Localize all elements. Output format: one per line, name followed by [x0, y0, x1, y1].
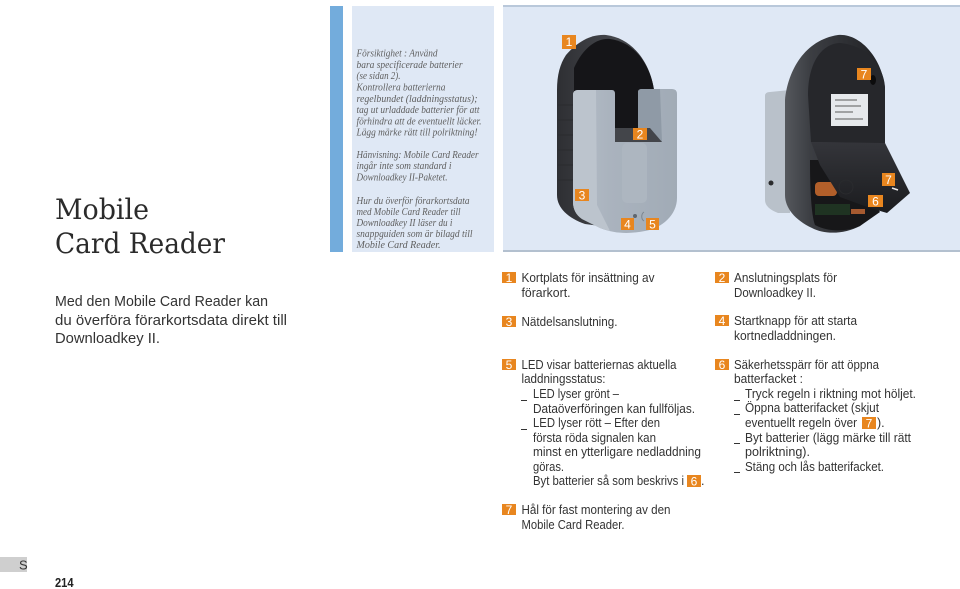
- legend item 6: Byt batterier (lägg märke till rätt: [745, 431, 912, 445]
- blue accent bar: [330, 6, 343, 252]
- badge 5: 5: [649, 218, 656, 232]
- note: reference: ingår inte som standard i: [356, 161, 452, 172]
- note: transfer: Mobile Card Reader.: [356, 240, 440, 251]
- badge 4: 4: [624, 218, 631, 232]
- legend item 5: LED visar batteriernas aktuella: [522, 358, 677, 372]
- badge 7 lower: 7: [885, 173, 892, 187]
- badge 7 lower: [882, 173, 895, 187]
- legend item 6: [715, 358, 916, 474]
- legend item 5: LED lyser grönt –: [533, 387, 619, 401]
- badge 1: [562, 35, 576, 49]
- legend item 2: Downloadkey II.: [734, 286, 816, 300]
- legend item 6: ).: [877, 416, 885, 430]
- legend item 5: 5: [506, 358, 513, 372]
- legend item 6: Öppna batterifacket (skjut: [745, 401, 879, 415]
- note: transfer: Hur du överför förarkortsdata: [356, 196, 470, 207]
- badge 3: [575, 188, 589, 202]
- section tab S: [0, 557, 28, 572]
- note: transfer: Downloadkey II läser du i: [356, 218, 453, 229]
- intro text: Med den Mobile Card Reader kan: [55, 293, 268, 310]
- legend item 2: Anslutningsplats för: [734, 271, 837, 285]
- legend item 7: Hål för fast montering av den: [522, 503, 671, 517]
- badge 6: 6: [872, 194, 879, 208]
- legend item 4: kortnedladdningen.: [734, 329, 836, 343]
- intro text: Downloadkey II.: [55, 330, 160, 347]
- note: caution: [356, 48, 482, 138]
- title: Card Reader: [55, 227, 226, 260]
- note: caution: Lägg märke rätt till polriktning!: [356, 128, 478, 138]
- intro text: du överföra förarkortsdata direkt till: [55, 312, 287, 329]
- legend item 6: polriktning).: [745, 445, 810, 459]
- intro text: [55, 293, 287, 347]
- badge 6: [868, 194, 883, 208]
- legend item 6: Stäng och lås batterifacket.: [745, 460, 884, 474]
- title: [55, 193, 226, 260]
- device: front view: [557, 35, 677, 233]
- legend item 4: [715, 314, 857, 343]
- legend item 5: LED lyser rött – Efter den: [533, 416, 660, 430]
- note: reference: [356, 150, 479, 184]
- note: caution: (se sidan 2).: [356, 71, 400, 82]
- note: caution: Försiktighet : Använd: [356, 48, 438, 60]
- legend item 5: Dataöverföringen kan fullföljas.: [533, 402, 695, 416]
- panel: product photo: [503, 5, 960, 252]
- badge 7 top: 7: [861, 68, 868, 82]
- note: caution: tag ut urladdade batterier för att: [356, 105, 480, 116]
- legend item 6: eventuellt regeln över: [745, 416, 857, 430]
- note: caution: regelbundet (laddningsstatus);: [356, 94, 478, 105]
- legend item 4: Startknapp för att starta: [734, 314, 857, 328]
- note: caution: förhindra att de eventuellt läcker.: [356, 116, 482, 128]
- legend item 5: .: [701, 474, 704, 488]
- device: rear view: [765, 35, 910, 233]
- note: transfer: med Mobile Card Reader till: [356, 207, 461, 218]
- legend item 1: Kortplats för insättning av: [522, 271, 655, 285]
- title: Mobile: [55, 193, 149, 226]
- note: transfer: [356, 196, 473, 251]
- legend item 7: [502, 503, 671, 532]
- legend item 1: [502, 271, 655, 300]
- panel: safety notes: [352, 6, 494, 252]
- legend item 2: 2: [719, 271, 726, 285]
- legend item 5: [502, 358, 704, 488]
- note: reference: Hänvisning: Mobile Card Reader: [356, 150, 479, 161]
- legend item 2: [715, 271, 837, 300]
- legend item 5: göras.: [533, 460, 564, 474]
- badge 2: 2: [637, 128, 644, 142]
- note: transfer: snappguiden som är bilagd till: [356, 229, 473, 240]
- note: reference: Downloadkey II-Paketet.: [356, 172, 448, 184]
- legend item 6: Tryck regeln i riktning mot höljet.: [745, 387, 916, 401]
- badge 2: [633, 128, 647, 142]
- legend item 5: minst en ytterligare nedladdning: [533, 445, 701, 459]
- legend item 1: förarkort.: [522, 286, 570, 300]
- legend item 5: laddningsstatus:: [522, 372, 606, 386]
- legend item 5: Byt batterier så som beskrivs i: [533, 474, 684, 488]
- legend item 5: första röda signalen kan: [533, 431, 656, 445]
- legend item 6: Säkerhetsspärr för att öppna: [734, 358, 879, 372]
- legend item 1: 1: [506, 271, 513, 285]
- section tab S: S: [19, 558, 28, 572]
- legend item 3: 3: [506, 315, 513, 329]
- legend item 6: 6: [719, 358, 726, 372]
- note: caution: bara specificerade batterier: [356, 60, 463, 71]
- legend item 6: 7: [866, 416, 873, 430]
- legend item 4: 4: [719, 314, 726, 328]
- badge 5: [646, 218, 659, 232]
- badge 3: 3: [579, 188, 586, 202]
- badge 4: [621, 218, 634, 232]
- badge 1: 1: [566, 35, 573, 49]
- legend item 5: 6: [691, 474, 698, 488]
- legend item 7: Mobile Card Reader.: [522, 518, 624, 532]
- legend item 6: batterfacket :: [734, 372, 803, 386]
- legend item 7: 7: [506, 503, 513, 517]
- badge 7 top: [857, 68, 871, 82]
- legend item 3: Nätdelsanslutning.: [522, 315, 618, 329]
- note: caution: Kontrollera batterierna: [356, 82, 446, 94]
